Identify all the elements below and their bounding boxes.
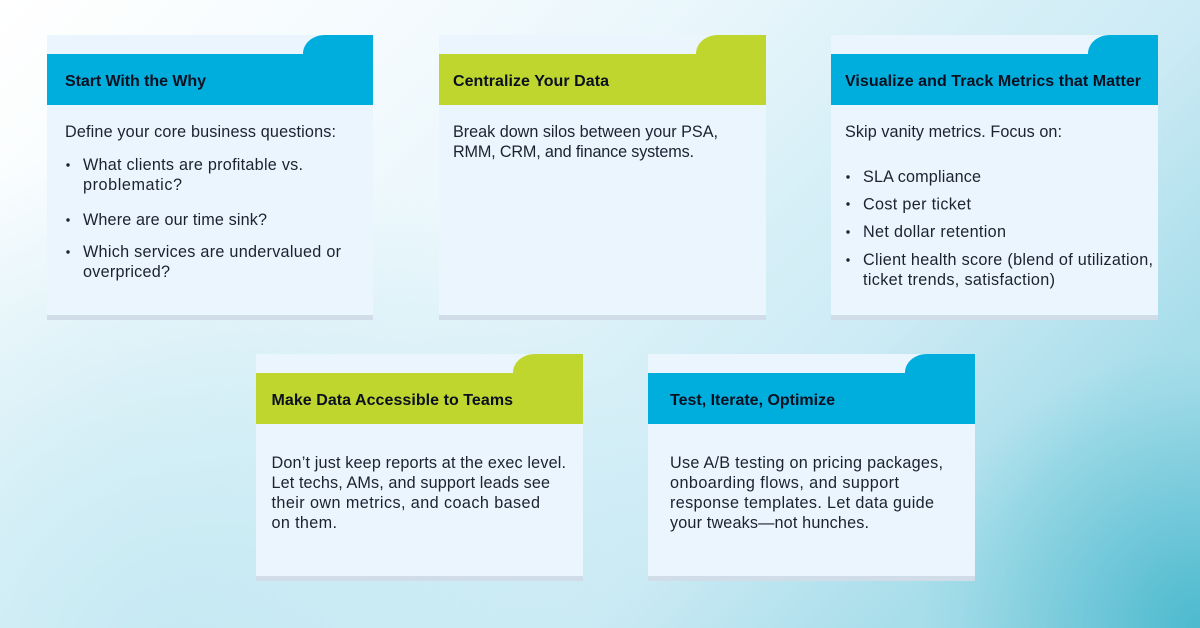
text block: core business questions: Define your core business questions: [65,123,336,141]
text block: break down silos: RMM, CRM, and finance systems. [453,143,694,161]
text block: core business questions: Where are our time sink? [83,211,267,229]
text block: metrics list: Net dollar retention [863,223,1006,241]
text block: core business questions: overpriced? [83,263,170,281]
text block: metrics list: Skip vanity metrics. Focus on: [845,123,1062,141]
text block: metrics list: Cost per ticket [863,196,972,214]
heading: Test, Iterate, Optimize: Test, Iterate, Optimize [670,392,835,409]
header tab: blue [47,35,373,105]
text block: accessible reports [272,454,566,532]
heading: Centralize Your Data: Centralize Your Data [453,73,609,90]
text block: metrics list: Client health score (blend of utilization, [863,251,1153,269]
text block: A/B testing: response templates. Let data guide [670,494,934,512]
text block: break down silos: Break down silos between your PSA, [453,123,718,141]
panel: Test, Iterate, Optimize [648,354,975,581]
text block: A/B testing: onboarding flows, and support [670,474,900,492]
text block: accessible reports: Don’t just keep reports at the exec level. [272,454,566,472]
text block: metrics list: ticket trends, satisfaction) [863,271,1055,289]
text block: metrics list [845,123,1153,289]
text block: accessible reports: Let techs, AMs, and support leads see [272,474,550,492]
heading: Make Data Accessible to Teams: Make Data Accessible to Teams [272,392,513,409]
text block: accessible reports: on them. [272,514,337,532]
header tab: blue [648,354,975,424]
text block: accessible reports: their own metrics, and coach based [272,494,540,512]
panel: Make Data Accessible to Teams [256,354,583,581]
text block: A/B testing: your tweaks—not hunches. [670,514,869,532]
heading: Visualize and Track Metrics that Matter: Visualize and Track Metrics that Matter [845,73,1141,90]
text block: A/B testing [670,454,943,532]
text block: break down silos [453,123,718,161]
panel: Visualize and Track Metrics that Matter [831,35,1158,320]
header tab: green [256,354,583,424]
text block: core business questions: What clients are profitable vs. [83,156,303,174]
header tab: green [439,35,766,105]
text block: core business questions: Which services are undervalued or [83,243,342,261]
text block: metrics list: SLA compliance [863,168,981,186]
text block: core business questions [65,123,342,281]
header tab: blue [831,35,1158,105]
text block: A/B testing: Use A/B testing on pricing packages, [670,454,943,472]
text block: core business questions: problematic? [83,176,182,194]
panel: Centralize Your Data [439,35,766,320]
panel: Start With the Why [47,35,373,320]
heading: Start With the Why: Start With the Why [65,73,206,90]
